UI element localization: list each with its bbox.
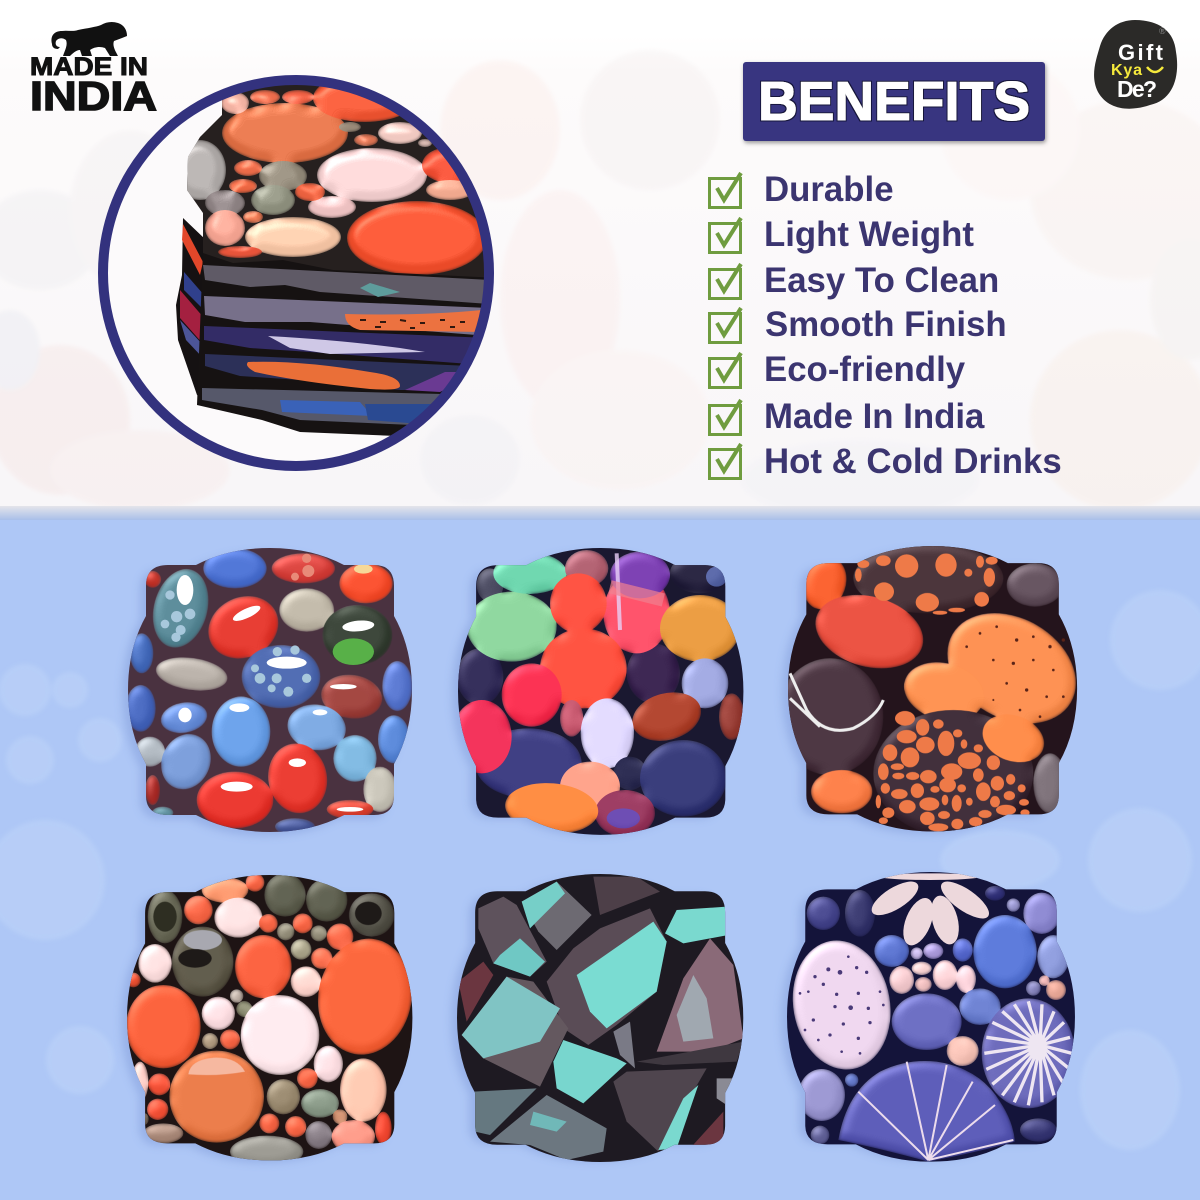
logo: Gift Kya De: ® bbox=[1159, 26, 1166, 36]
logo: Gift Kya De bbox=[1094, 20, 1177, 109]
benefits checklist bbox=[710, 170, 1062, 481]
coaster 6: purple and white patterned pebbles bbox=[780, 865, 1080, 1165]
orange coaster bbox=[205, 354, 480, 392]
top coaster surface bbox=[187, 85, 484, 277]
text: INDIA: INDIA bbox=[30, 73, 157, 119]
coaster 5: teal and grey rocks bbox=[450, 865, 750, 1165]
circle inset: stacked coasters bbox=[103, 74, 500, 466]
coaster 1: blue and red gems bbox=[120, 540, 420, 840]
coaster 2: translucent gemstones bbox=[450, 540, 750, 840]
item: Hot & Cold Drinks: Hot & Cold Drinks bbox=[764, 442, 1062, 481]
logo: Gift Kya De: Gift bbox=[1118, 40, 1164, 65]
item: Easy To Clean: Easy To Clean bbox=[764, 261, 999, 300]
item: Eco-friendly: Eco-friendly bbox=[764, 350, 966, 389]
coaster 3: orange patterned pebbles bbox=[777, 540, 1096, 840]
rear coasters bbox=[176, 218, 203, 396]
bottom coaster bbox=[202, 388, 440, 425]
top background panel bbox=[0, 0, 1200, 520]
logo: Gift Kya De: Kya bbox=[1111, 62, 1142, 79]
icon: lion bbox=[51, 22, 127, 56]
grey coaster bbox=[203, 265, 490, 304]
item: Smooth Finish: Smooth Finish bbox=[765, 305, 1007, 344]
fan coaster bbox=[204, 326, 490, 364]
speckled coaster bbox=[204, 296, 490, 336]
item: Durable: Durable bbox=[764, 170, 894, 209]
item: Made In India: Made In India bbox=[764, 397, 985, 436]
heading: Benefits: BENEFITS bbox=[758, 70, 1030, 132]
bottom blue panel bbox=[0, 506, 1200, 1200]
logo: Gift Kya De: De? bbox=[1117, 76, 1157, 102]
coaster 4: round red pebbles bbox=[120, 865, 421, 1168]
text: MADE IN: MADE IN bbox=[30, 53, 148, 81]
logo: Made in India bbox=[30, 22, 157, 119]
item: Light Weight: Light Weight bbox=[764, 215, 974, 254]
stack underlay bbox=[197, 250, 495, 440]
